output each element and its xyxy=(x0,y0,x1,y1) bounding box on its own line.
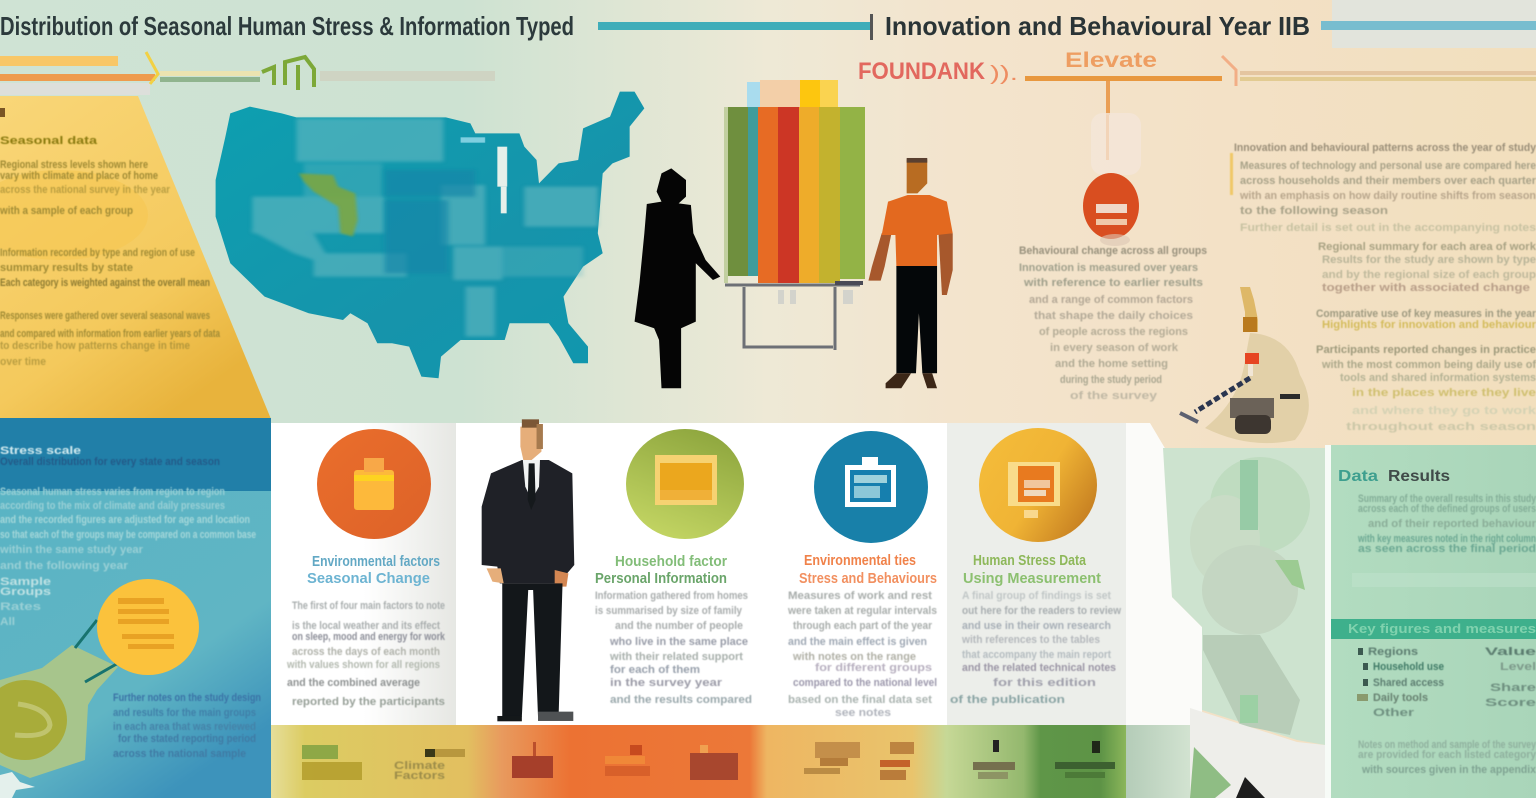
card 1 text: on sleep, mood and energy for work xyxy=(292,631,446,643)
sub header left with icon xyxy=(0,52,495,95)
panel: mint: as seen across the final period xyxy=(1358,543,1536,555)
panel: blue: All xyxy=(0,616,15,628)
icon: tablet xyxy=(1008,462,1060,518)
panel: yellow: Information recorded by type and region of use xyxy=(0,247,195,259)
panel: blue: Groups xyxy=(0,586,51,598)
panel: blue: and the following year xyxy=(0,560,129,572)
green leaf section xyxy=(1163,448,1325,745)
panel: mint: Key figures and measures xyxy=(1348,621,1536,636)
band icon 4 xyxy=(605,745,650,776)
center text block xyxy=(1019,245,1207,402)
icon: red badge xyxy=(1083,173,1139,239)
icon: document xyxy=(354,458,394,510)
panel: blue: Further notes on the study design xyxy=(113,692,261,704)
card 3 text: for different groups xyxy=(815,662,932,674)
map xyxy=(216,92,644,378)
card 3 text: with notes on the range xyxy=(792,651,916,663)
mint list: Household use xyxy=(1373,661,1444,673)
star mark xyxy=(0,772,35,798)
panel: blue: for the stated reporting period xyxy=(118,733,256,745)
mint list bullets xyxy=(1357,648,1368,701)
card 2 text: Personal Information xyxy=(595,570,727,587)
white strip xyxy=(1325,445,1331,798)
card 2 text: and the results compared xyxy=(610,694,752,706)
right text block two: in the places where they live xyxy=(1352,387,1536,399)
card 1 text: reported by the participants xyxy=(292,696,445,708)
yellow panel highlight xyxy=(0,170,148,260)
woman silhouette xyxy=(635,168,720,388)
band label 2 xyxy=(394,760,445,782)
chart stand xyxy=(725,285,860,350)
callout: olive circle xyxy=(0,680,67,760)
card 1: orange circle xyxy=(317,429,431,539)
mint list: Daily tools xyxy=(1373,692,1428,704)
title left: Distribution of Seasonal Human Stress & Information Typed xyxy=(0,11,574,41)
center text block: during the study period xyxy=(1060,374,1162,386)
panel: yellow: with a sample of each group xyxy=(0,205,133,217)
card 2 text: Household factor xyxy=(615,553,727,570)
card 2 text: in the survey year xyxy=(610,677,723,689)
card 3 text xyxy=(787,552,937,719)
panel: blue: Overall distribution for every state and season xyxy=(0,456,220,468)
panel: yellow: across the national survey in the year xyxy=(0,184,171,196)
card 3 text: compared to the national level xyxy=(793,677,937,689)
lower right light block xyxy=(1126,725,1194,798)
right text block two: throughout each season xyxy=(1346,421,1536,433)
green triangle and dark marker xyxy=(1190,747,1265,798)
card 1 text: The first of four main factors to note xyxy=(292,600,445,612)
panel: yellow: over time xyxy=(0,356,46,368)
panel: yellow: summary results by state xyxy=(0,262,133,274)
card 3 text: based on the final data set xyxy=(788,694,932,706)
right text block one: to the following season xyxy=(1240,205,1388,217)
center text block: and a range of common factors xyxy=(1029,294,1193,306)
capsule xyxy=(1091,113,1141,175)
center text block: that shape the daily choices xyxy=(1034,310,1193,322)
card 4: yellow circle xyxy=(979,428,1097,542)
right text block two: Participants reported changes in practice xyxy=(1316,344,1536,356)
icon: plant xyxy=(262,57,314,90)
center text block: Behavioural change across all groups xyxy=(1019,245,1207,257)
band icon 6 xyxy=(804,742,860,774)
mint list: Level xyxy=(1500,661,1536,673)
card 4 text: out here for the readers to review xyxy=(962,605,1121,617)
mint list: Share xyxy=(1490,682,1536,694)
band label 2: Climate xyxy=(394,760,445,772)
right text block one: Further detail is set out in the accompanying notes xyxy=(1240,222,1536,234)
band icon 7 xyxy=(880,742,914,780)
card 4 text: of the publication xyxy=(950,694,1065,706)
card 3 text: Stress and Behaviours xyxy=(799,570,937,587)
panel: blue: Stress scale xyxy=(0,445,81,457)
illustration: tool and pale blob xyxy=(1180,287,1309,443)
card 4 text: A final group of findings is set xyxy=(962,590,1111,602)
callout: yellow circle xyxy=(97,579,199,675)
icon: screen xyxy=(655,455,717,505)
panel: blue: Sample xyxy=(0,576,51,588)
right text block one: across households and their members over each quarter xyxy=(1240,175,1536,187)
card 2 text: is summarised by size of family xyxy=(595,605,743,617)
map lakes xyxy=(497,147,507,213)
center text block: and the home setting xyxy=(1055,358,1168,370)
card 1 text: Environmental factors xyxy=(312,553,440,570)
panel: yellow: Seasonal data xyxy=(0,135,98,147)
card 1 text xyxy=(286,553,446,708)
header rule left xyxy=(598,22,871,30)
band icon 1 xyxy=(302,745,362,780)
card 2 text: for each of them xyxy=(610,664,700,676)
labels and hanger: )). xyxy=(990,63,1018,85)
man in orange shirt xyxy=(868,158,953,388)
band icon 9 xyxy=(1055,741,1115,778)
panel: blue: so that each of the groups may be compared on a common base xyxy=(0,529,256,541)
map green inset xyxy=(299,173,358,237)
card 1 text: is the local weather and its effect xyxy=(292,620,440,632)
panel: yellow: to describe how patterns change in time xyxy=(0,340,190,352)
panel: yellow: Regional stress levels shown here xyxy=(0,159,148,171)
labels and hanger: FOUNDANK xyxy=(858,58,986,85)
panel: blue: Rates xyxy=(0,601,41,613)
panel: blue: according to the mix of climate and daily pressures xyxy=(0,500,225,512)
connector tube xyxy=(0,645,118,778)
panel: blue: and results for the main groups xyxy=(113,707,256,719)
chart grip xyxy=(835,281,863,285)
mint list: Other xyxy=(1373,707,1415,719)
card 1 text: with values shown for all regions xyxy=(286,659,440,671)
mint section band xyxy=(1331,619,1536,639)
band icon 2 xyxy=(425,749,465,757)
mint list xyxy=(1358,646,1536,776)
panel: mint: and of their reported behaviour xyxy=(1368,518,1536,530)
card 3 text: see notes xyxy=(835,707,891,719)
panel: blue xyxy=(0,418,271,798)
center text block: with reference to earlier results xyxy=(1023,277,1203,289)
card 3 text: and the main effect is given xyxy=(788,636,927,648)
panel: yellow: vary with climate and place of home xyxy=(0,170,158,182)
card 4 text xyxy=(950,552,1121,706)
right text block two: tools and shared information systems xyxy=(1340,372,1536,384)
bottom band xyxy=(271,725,1126,798)
card 3: blue circle xyxy=(814,431,928,543)
mint list: Shared access xyxy=(1373,677,1444,689)
panel: blue: across the national sample xyxy=(113,748,246,760)
card 2 text: with their related support xyxy=(609,651,743,663)
card 2: green circle xyxy=(626,429,744,539)
mint list: Score xyxy=(1485,697,1536,709)
center text block: of the survey xyxy=(1070,390,1158,402)
panel: yellow: and compared with information from earlier years of data xyxy=(0,328,221,340)
panel: yellow: Responses were gathered over several seasonal waves xyxy=(0,310,210,322)
band icon 5 xyxy=(690,745,738,780)
panel: mint: Results xyxy=(1388,468,1450,485)
icon: clipboard xyxy=(845,457,896,507)
panel: blue: Seasonal human stress varies from region to region xyxy=(0,486,225,498)
right text block two: Regional summary for each area of work xyxy=(1318,241,1536,253)
card 3 text: through each part of the year xyxy=(793,620,933,632)
mint list: Value xyxy=(1485,646,1536,658)
band icon 8 xyxy=(973,740,1015,779)
card 1 text: Seasonal Change xyxy=(307,570,430,587)
right text block two: together with associated change xyxy=(1322,282,1530,294)
right text block two: Results for the study are shown by type xyxy=(1322,254,1536,266)
panel: mint xyxy=(1331,445,1536,798)
right text block one: with an emphasis on how daily routine shifts from season xyxy=(1239,190,1536,202)
right text block two: with the most common being daily use of xyxy=(1321,359,1536,371)
man in suit xyxy=(482,419,574,721)
right text block two: and by the regional size of each group xyxy=(1322,269,1536,281)
panel: centre cards xyxy=(271,423,1126,726)
card 3 text: were taken at regular intervals xyxy=(787,605,937,617)
right text block two: Highlights for innovation and behaviour xyxy=(1322,319,1536,331)
card 3 text: Measures of work and rest xyxy=(788,590,932,602)
card 4 text: with references to the tables xyxy=(961,634,1100,646)
panel: mint: Data xyxy=(1338,468,1378,485)
right text block two: and where they go to work xyxy=(1352,405,1536,417)
card 2 text: Information gathered from homes xyxy=(595,590,748,602)
right text block two xyxy=(1316,241,1536,433)
card 4 text: and the related technical notes xyxy=(962,662,1116,674)
header band right tone xyxy=(1332,0,1536,48)
center text block: in every season of work xyxy=(1050,342,1179,354)
panel: blue: and the recorded figures are adjusted for age and location xyxy=(0,514,250,526)
card 4 text: that accompany the main report xyxy=(962,649,1111,661)
panel: yellow: Each category is weighted against the overall mean xyxy=(0,277,210,289)
band label 2: Factors xyxy=(394,770,445,782)
card 1 text: across the days of each month xyxy=(292,646,440,658)
right text block one xyxy=(1230,142,1536,234)
center text block: Innovation is measured over years xyxy=(1019,262,1198,274)
card 4 text: Human Stress Data xyxy=(973,552,1087,569)
card 4 text: for this edition xyxy=(993,677,1096,689)
map state tints xyxy=(250,118,598,337)
title right: Innovation and Behavioural Year IIB xyxy=(885,11,1310,41)
striped column chart xyxy=(724,80,865,350)
white sweep xyxy=(1126,423,1202,725)
header rule right xyxy=(1321,21,1536,30)
card 2 text: who live in the same place xyxy=(609,636,748,648)
band icon 3 xyxy=(512,742,553,778)
card 4 text: Using Measurement xyxy=(963,570,1101,587)
card 2 text xyxy=(595,553,752,706)
mint list: Regions xyxy=(1368,646,1418,658)
card 3 text: Environmental ties xyxy=(804,552,916,569)
panel: yellow xyxy=(0,96,271,419)
panel: blue: in each area that was reviewed xyxy=(113,721,256,733)
card 2 text: and the number of people xyxy=(615,620,743,632)
center text block: of people across the regions xyxy=(1039,326,1188,338)
card 4 text: and use in their own research xyxy=(962,620,1111,632)
card 1 text: and the combined average xyxy=(287,677,420,689)
labels and hanger xyxy=(858,49,1536,175)
labels and hanger: Elevate xyxy=(1065,49,1157,72)
panel: blue: within the same study year xyxy=(0,544,144,556)
